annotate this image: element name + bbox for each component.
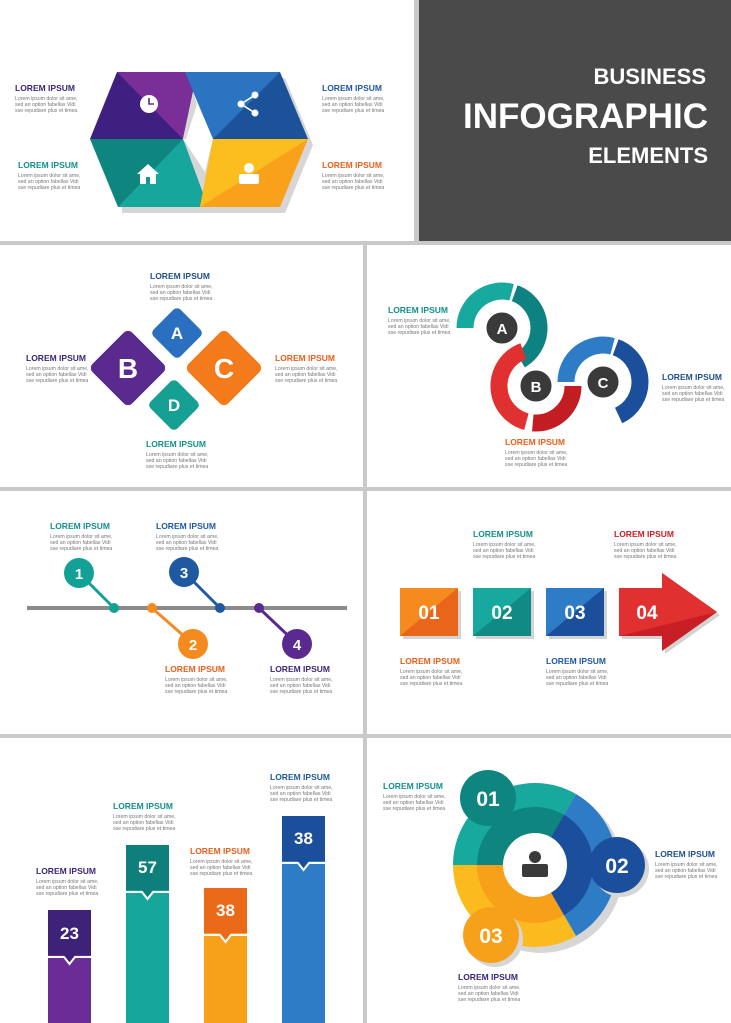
text: hex top-right: LOREM IPSUM bbox=[322, 83, 382, 93]
text: diamonds left: Lorem ipsum dolor sit ame, bbox=[26, 366, 89, 372]
text: circle 02 label bbox=[655, 849, 718, 880]
text: arcs right: LOREM IPSUM bbox=[662, 372, 722, 382]
text: steps top 04: sed an option fabellas Vidi bbox=[614, 548, 674, 554]
text: diamonds bottom: Lorem ipsum dolor sit ame, bbox=[146, 452, 209, 458]
text: timeline 2: Lorem ipsum dolor sit ame, bbox=[165, 677, 228, 683]
diamond A bbox=[150, 306, 204, 360]
text: timeline 2: sed an option fabellas Vidi bbox=[165, 683, 225, 689]
step 01 bbox=[400, 588, 461, 639]
panel: timeline bbox=[27, 557, 347, 659]
step 01: 01 bbox=[418, 603, 440, 624]
text: timeline 4: sse repudiare plus et timea bbox=[270, 689, 332, 695]
text: hex bottom-left: sed an option fabellas Vidi bbox=[18, 179, 78, 185]
text: diamonds bottom: sed an option fabellas Vidi bbox=[146, 458, 206, 464]
pin 1: 1 bbox=[75, 566, 83, 583]
bar 23: 23 bbox=[60, 924, 79, 943]
text: bar 23 label: LOREM IPSUM bbox=[36, 866, 96, 876]
text: bar 38 orange label: sed an option fabellas Vidi bbox=[190, 865, 250, 871]
step 02 bbox=[473, 588, 534, 639]
text: bar 23 label bbox=[36, 866, 99, 897]
text: arcs left: sed an option fabellas Vidi bbox=[388, 324, 448, 330]
text: circle 01 label: Lorem ipsum dolor sit ame, bbox=[383, 794, 446, 800]
badge 01: 01 bbox=[476, 788, 500, 811]
text: diamonds top: Lorem ipsum dolor sit ame, bbox=[150, 284, 213, 290]
text: steps top 02 bbox=[473, 529, 536, 560]
bar 38 blue bbox=[282, 816, 325, 1023]
pin 2 bbox=[147, 603, 208, 659]
pin 3: 3 bbox=[180, 565, 188, 582]
text: arcs right: sed an option fabellas Vidi bbox=[662, 391, 722, 397]
bar 38 orange: 38 bbox=[216, 901, 235, 920]
pin 2: 2 bbox=[189, 637, 197, 654]
text: hex bottom-left: LOREM IPSUM bbox=[18, 160, 78, 170]
text: diamonds bottom bbox=[146, 439, 209, 470]
text: steps top 02: sed an option fabellas Vidi bbox=[473, 548, 533, 554]
bar 57 bbox=[126, 845, 169, 1023]
text: timeline 4: LOREM IPSUM bbox=[270, 664, 330, 674]
diamond C bbox=[184, 328, 264, 408]
text: timeline 3 bbox=[156, 521, 219, 552]
panel: steps bbox=[400, 573, 720, 654]
text: arcs bottom: Lorem ipsum dolor sit ame, bbox=[505, 450, 568, 456]
step 03: 03 bbox=[564, 603, 586, 624]
text: arcs right: Lorem ipsum dolor sit ame, bbox=[662, 385, 725, 391]
text: arcs bottom: LOREM IPSUM bbox=[505, 437, 565, 447]
text: timeline 3: sse repudiare plus et timea bbox=[156, 546, 218, 552]
diamond D bbox=[147, 378, 201, 432]
text: diamonds bottom: sse repudiare plus et timea bbox=[146, 464, 208, 470]
text: steps bottom 03: Lorem ipsum dolor sit ame, bbox=[546, 669, 609, 675]
diamond B: B bbox=[118, 353, 138, 384]
text: timeline 3: sed an option fabellas Vidi bbox=[156, 540, 216, 546]
text: timeline 2 bbox=[165, 664, 228, 695]
text: timeline 4: sed an option fabellas Vidi bbox=[270, 683, 330, 689]
text: timeline 4: Lorem ipsum dolor sit ame, bbox=[270, 677, 333, 683]
diamond C: C bbox=[214, 353, 234, 384]
text: timeline 1: Lorem ipsum dolor sit ame, bbox=[50, 534, 113, 540]
text: steps bottom 03: sse repudiare plus et timea bbox=[546, 681, 608, 687]
badge 02 bbox=[589, 837, 649, 897]
arc B bbox=[499, 351, 573, 423]
arc C: C bbox=[598, 375, 609, 392]
text: bar 38 blue label bbox=[270, 772, 333, 803]
segment: blue share bbox=[185, 72, 308, 139]
text: hex top-left: sed an option fabellas Vidi bbox=[15, 102, 75, 108]
text: arcs bottom: sse repudiare plus et timea bbox=[505, 462, 567, 468]
text: circle 02 label: LOREM IPSUM bbox=[655, 849, 715, 859]
text: bar 38 orange label bbox=[190, 846, 253, 877]
text: bar 23 label: Lorem ipsum dolor sit ame, bbox=[36, 879, 99, 885]
text: bar 38 orange label: Lorem ipsum dolor sit ame, bbox=[190, 859, 253, 865]
text: bar 38 orange label: sse repudiare plus et timea bbox=[190, 871, 252, 877]
text: diamonds top: LOREM IPSUM bbox=[150, 271, 210, 281]
arc A bbox=[465, 291, 539, 360]
segment: yellow user bbox=[200, 139, 308, 207]
pin 4 bbox=[254, 603, 312, 659]
text: steps top 02: LOREM IPSUM bbox=[473, 529, 533, 539]
badge 03: 03 bbox=[479, 925, 503, 948]
pin 4: 4 bbox=[293, 637, 302, 654]
pin 3 bbox=[169, 557, 225, 613]
text: arcs left bbox=[388, 305, 451, 336]
text: circle 01 label: LOREM IPSUM bbox=[383, 781, 443, 791]
text: bar 23 label: sed an option fabellas Vidi bbox=[36, 885, 96, 891]
text: bar 38 blue label: sed an option fabellas Vidi bbox=[270, 791, 330, 797]
text: diamonds left: LOREM IPSUM bbox=[26, 353, 86, 363]
text: hex top-right: Lorem ipsum dolor sit ame, bbox=[322, 96, 385, 102]
bar chart bbox=[48, 816, 325, 1023]
text: circle 03 label: Lorem ipsum dolor sit ame, bbox=[458, 985, 521, 991]
text: circle 01 label: sed an option fabellas Vidi bbox=[383, 800, 443, 806]
text: steps top 02: Lorem ipsum dolor sit ame, bbox=[473, 542, 536, 548]
text: hex bottom-left bbox=[18, 160, 81, 191]
text: bar 57 label bbox=[113, 801, 176, 832]
text: diamonds top: sed an option fabellas Vidi bbox=[150, 290, 210, 296]
text: bar 38 blue label: Lorem ipsum dolor sit ame, bbox=[270, 785, 333, 791]
text: circle 02 label: Lorem ipsum dolor sit ame, bbox=[655, 862, 718, 868]
text: bar 38 orange label: LOREM IPSUM bbox=[190, 846, 250, 856]
segment: teal home bbox=[90, 139, 208, 207]
text: steps bottom 03: sed an option fabellas Vidi bbox=[546, 675, 606, 681]
text: bar 38 blue label: sse repudiare plus et timea bbox=[270, 797, 332, 803]
text: circle 02 label: sed an option fabellas Vidi bbox=[655, 868, 715, 874]
step 03 bbox=[546, 588, 607, 639]
text: circle 03 label: sed an option fabellas Vidi bbox=[458, 991, 518, 997]
bar 38 orange bbox=[204, 888, 247, 1023]
bar 57: 57 bbox=[138, 858, 157, 877]
text: arcs bottom bbox=[505, 437, 568, 468]
segment: purple clock bbox=[90, 72, 197, 139]
title panel: ELEMENTS bbox=[588, 143, 708, 168]
text: hex top-left bbox=[15, 83, 78, 114]
text: steps top 04: sse repudiare plus et timea bbox=[614, 554, 676, 560]
text: hex bottom-right: sse repudiare plus et timea bbox=[322, 185, 384, 191]
text: timeline 2: LOREM IPSUM bbox=[165, 664, 225, 674]
diamond A: A bbox=[171, 324, 183, 343]
text: steps bottom 03: LOREM IPSUM bbox=[546, 656, 606, 666]
text: hex top-left: sse repudiare plus et timea bbox=[15, 108, 77, 114]
text: timeline 2: sse repudiare plus et timea bbox=[165, 689, 227, 695]
text: hex bottom-left: sse repudiare plus et timea bbox=[18, 185, 80, 191]
text: timeline 1: LOREM IPSUM bbox=[50, 521, 110, 531]
text: circle 03 label bbox=[458, 972, 521, 1003]
badge 03 bbox=[463, 907, 523, 967]
text: steps bottom 01 bbox=[400, 656, 463, 687]
text: steps bottom 01: Lorem ipsum dolor sit ame, bbox=[400, 669, 463, 675]
arc C bbox=[566, 345, 640, 416]
text: hex top-right bbox=[322, 83, 385, 114]
text: bar 57 label: LOREM IPSUM bbox=[113, 801, 173, 811]
text: timeline 1: sed an option fabellas Vidi bbox=[50, 540, 110, 546]
text: bar 38 blue label: LOREM IPSUM bbox=[270, 772, 330, 782]
text: arcs left: LOREM IPSUM bbox=[388, 305, 448, 315]
text: steps bottom 01: sse repudiare plus et timea bbox=[400, 681, 462, 687]
step 04 arrow: 04 bbox=[636, 603, 658, 624]
text: timeline 1 bbox=[50, 521, 113, 552]
text: arcs right bbox=[662, 372, 725, 403]
text: hex top-left: LOREM IPSUM bbox=[15, 83, 75, 93]
text: circle 02 label: sse repudiare plus et timea bbox=[655, 874, 717, 880]
text: diamonds left: sse repudiare plus et timea bbox=[26, 378, 88, 384]
text: steps bottom 01: sed an option fabellas Vidi bbox=[400, 675, 460, 681]
text: diamonds left bbox=[26, 353, 89, 384]
text: diamonds right: LOREM IPSUM bbox=[275, 353, 335, 363]
step 04 arrow bbox=[619, 573, 720, 654]
text: diamonds top bbox=[150, 271, 213, 302]
text: steps top 04: LOREM IPSUM bbox=[614, 529, 674, 539]
icon: user bbox=[503, 833, 567, 897]
text: bar 57 label: sed an option fabellas Vidi bbox=[113, 820, 173, 826]
text: circle 01 label bbox=[383, 781, 446, 812]
panel: ABC arcs bbox=[465, 291, 640, 423]
step 02: 02 bbox=[491, 603, 513, 624]
text: diamonds top: sse repudiare plus et timea bbox=[150, 296, 212, 302]
text: hex top-right: sed an option fabellas Vidi bbox=[322, 102, 382, 108]
arc B: B bbox=[531, 379, 542, 396]
text: diamonds left: sed an option fabellas Vidi bbox=[26, 372, 86, 378]
text: diamonds right bbox=[275, 353, 338, 384]
panel: hexagon bbox=[90, 72, 313, 213]
text: steps top 04: Lorem ipsum dolor sit ame, bbox=[614, 542, 677, 548]
text: arcs bottom: sed an option fabellas Vidi bbox=[505, 456, 565, 462]
text: timeline 1: sse repudiare plus et timea bbox=[50, 546, 112, 552]
badge 01 bbox=[460, 770, 516, 826]
bar 23 bbox=[48, 910, 91, 1023]
text: diamonds right: sed an option fabellas Vidi bbox=[275, 372, 335, 378]
panel: circle chart bbox=[453, 770, 649, 967]
title panel: INFOGRAPHIC bbox=[463, 97, 708, 136]
text: arcs left: Lorem ipsum dolor sit ame, bbox=[388, 318, 451, 324]
text: timeline 4 bbox=[270, 664, 333, 695]
text: circle 03 label: LOREM IPSUM bbox=[458, 972, 518, 982]
diamond B bbox=[88, 328, 168, 408]
badge 02: 02 bbox=[605, 855, 629, 878]
arc A: A bbox=[497, 321, 508, 338]
text: circle 01 label: sse repudiare plus et timea bbox=[383, 806, 445, 812]
text: hex bottom-right bbox=[322, 160, 385, 191]
bar 38 blue: 38 bbox=[294, 829, 313, 848]
text: hex bottom-right: Lorem ipsum dolor sit ame, bbox=[322, 173, 385, 179]
text: steps bottom 01: LOREM IPSUM bbox=[400, 656, 460, 666]
text: timeline 3: Lorem ipsum dolor sit ame, bbox=[156, 534, 219, 540]
title panel bbox=[419, 0, 731, 241]
pin 1 bbox=[64, 558, 119, 613]
text: bar 57 label: sse repudiare plus et timea bbox=[113, 826, 175, 832]
title panel: BUSINESS bbox=[594, 64, 706, 89]
text: steps bottom 03 bbox=[546, 656, 609, 687]
text: steps top 02: sse repudiare plus et timea bbox=[473, 554, 535, 560]
text: diamonds bottom: LOREM IPSUM bbox=[146, 439, 206, 449]
text: arcs right: sse repudiare plus et timea bbox=[662, 397, 724, 403]
text: hex top-left: Lorem ipsum dolor sit ame, bbox=[15, 96, 78, 102]
text: bar 57 label: Lorem ipsum dolor sit ame, bbox=[113, 814, 176, 820]
text: hex bottom-left: Lorem ipsum dolor sit ame, bbox=[18, 173, 81, 179]
panel: ABCD diamonds bbox=[88, 306, 264, 432]
text: arcs left: sse repudiare plus et timea bbox=[388, 330, 450, 336]
text: circle 03 label: sse repudiare plus et timea bbox=[458, 997, 520, 1003]
text: bar 23 label: sse repudiare plus et timea bbox=[36, 891, 98, 897]
text: diamonds right: Lorem ipsum dolor sit ame, bbox=[275, 366, 338, 372]
text: hex bottom-right: sed an option fabellas Vidi bbox=[322, 179, 382, 185]
text: steps top 04 bbox=[614, 529, 677, 560]
text: hex bottom-right: LOREM IPSUM bbox=[322, 160, 382, 170]
text: diamonds right: sse repudiare plus et timea bbox=[275, 378, 337, 384]
text: hex top-right: sse repudiare plus et timea bbox=[322, 108, 384, 114]
diamond D: D bbox=[168, 396, 180, 415]
text: timeline 3: LOREM IPSUM bbox=[156, 521, 216, 531]
